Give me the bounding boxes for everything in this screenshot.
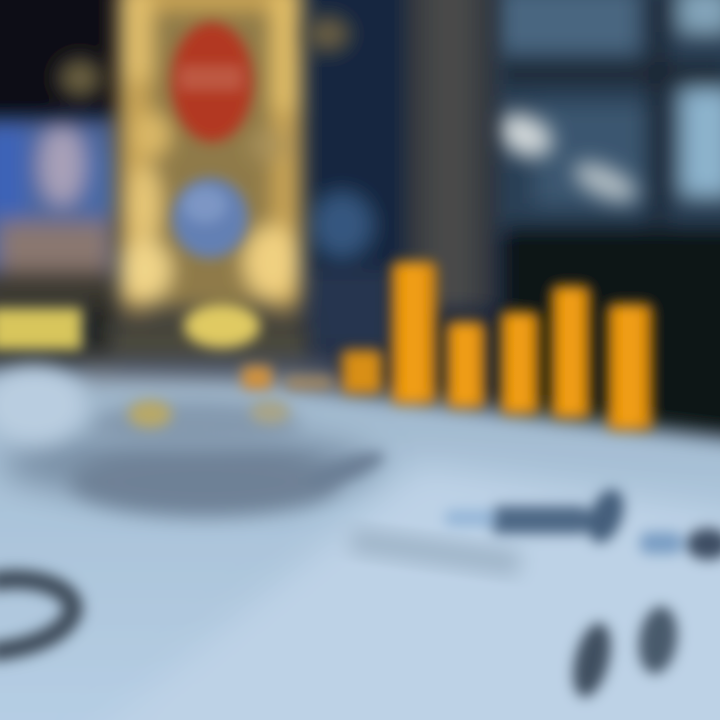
right windows [490, 0, 720, 440]
grey column [405, 0, 497, 310]
blue circle sign [172, 178, 248, 258]
white streak highlights [488, 104, 642, 210]
background: building interior [0, 0, 720, 440]
left poster [0, 58, 117, 370]
chart bars [242, 262, 652, 430]
table surface [0, 358, 720, 720]
dark marks bottom right [566, 604, 682, 701]
red circle sign [171, 22, 253, 142]
yellow base strip [0, 308, 82, 350]
faint text line on paper [349, 528, 521, 576]
yellow sign [108, 0, 308, 362]
yellow sign foot [184, 304, 260, 348]
glass dish on table [0, 367, 388, 516]
dark marks on paper [445, 484, 720, 560]
dark curve bottom left [0, 579, 73, 652]
top glow spot [306, 16, 350, 52]
paper on table [80, 465, 720, 720]
